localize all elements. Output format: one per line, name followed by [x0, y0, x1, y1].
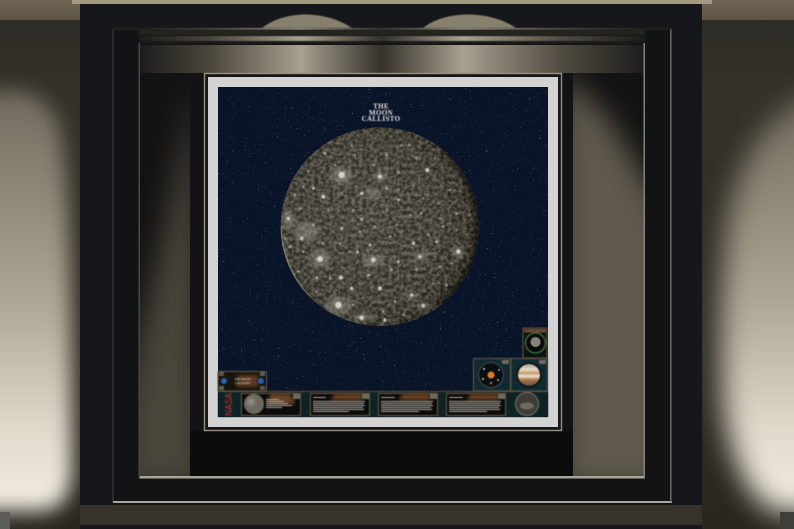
inset: solar system diagram: [474, 358, 510, 391]
info panel 1: moon summary: [242, 394, 300, 416]
poster title: THE: [373, 103, 389, 111]
spotlight glow: top right: [423, 14, 516, 28]
title plate: The Moon Callisto: [218, 372, 266, 391]
poster title: MOON: [369, 109, 393, 117]
moulding: top rails: [113, 28, 671, 44]
inset: Jupiter: [511, 358, 548, 391]
title plate: The Moon Callisto: THE MOON: [234, 377, 252, 381]
info panel 2: text: [310, 394, 370, 416]
info panel 4: text: [446, 394, 506, 416]
wall: right side: [702, 0, 794, 529]
poster frame and white mat: [204, 73, 562, 431]
poster sky: star field: [218, 87, 548, 417]
inset: Callisto orbit diagram: [523, 328, 547, 358]
icon: surface map medallion: [516, 392, 538, 416]
title plate: The Moon Callisto: CALLISTO: [235, 381, 251, 385]
spotlight glow: top left: [262, 14, 352, 28]
inner wall panel: [138, 43, 645, 478]
poster title: [362, 103, 401, 123]
wall: left side: [0, 0, 80, 529]
moon: Callisto: [280, 127, 480, 327]
bottom info strip: [218, 391, 548, 417]
info panel 3: text: [378, 394, 438, 416]
logo: NASA: NASA: [223, 393, 235, 416]
poster title: CALLISTO: [362, 115, 401, 123]
